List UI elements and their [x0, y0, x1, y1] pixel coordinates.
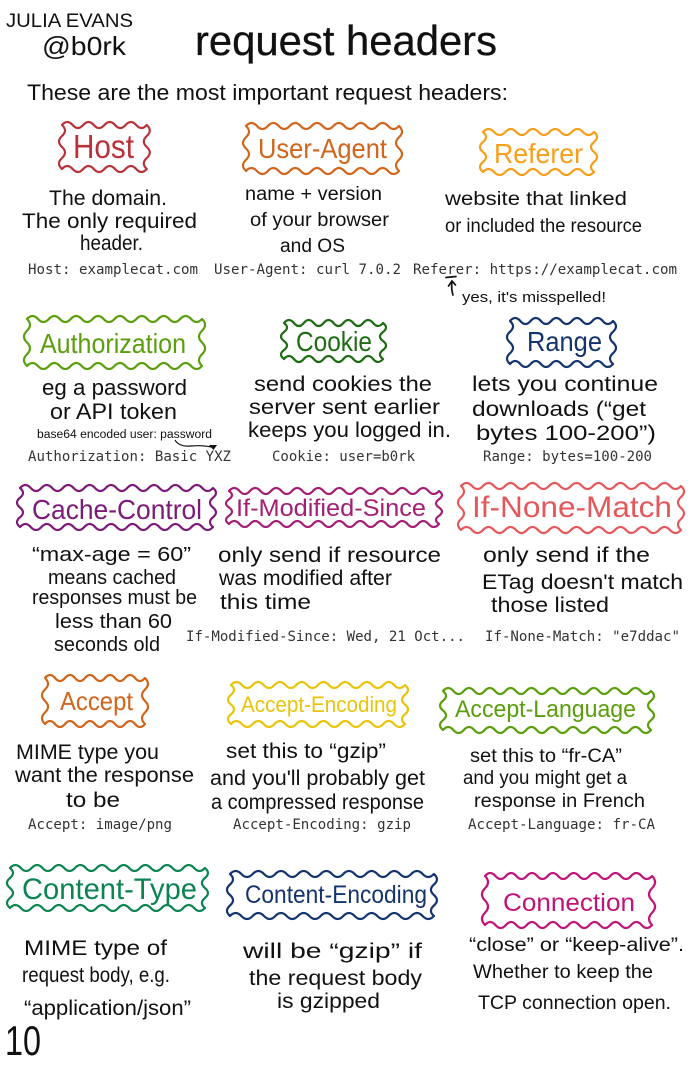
example: Accept: Accept: image/png — [28, 817, 172, 833]
wavy badge: Cache-Control — [17, 485, 216, 530]
example: Accept-Encoding: Accept-Encoding: gzip — [233, 817, 411, 833]
description: Accept-Encoding: a compressed response — [211, 791, 424, 814]
wavy badge: Host — [59, 122, 150, 172]
description: Authorization: eg a password — [42, 375, 187, 400]
wavy badge: Content-Type: Content-Type — [22, 873, 197, 906]
description: Connection: “close” or “keep-alive”. — [469, 935, 684, 956]
description: Accept: want the response — [14, 764, 194, 787]
wavy badge: Content-Encoding: Content-Encoding — [245, 881, 427, 909]
description: If-None-Match: ETag doesn't match — [482, 571, 683, 594]
description: Referer: website that linked — [444, 189, 627, 210]
note: base64 encoding — [37, 429, 217, 450]
description: If-None-Match — [482, 544, 683, 617]
description: Connection: Whether to keep the — [473, 962, 653, 983]
page number: 10 — [5, 1017, 41, 1064]
panel: Accept-Language — [440, 688, 655, 833]
panel: Content-Type — [7, 865, 208, 1020]
description: If-None-Match: those listed — [491, 594, 609, 617]
example: Range: Range: bytes=100-200 — [483, 449, 652, 465]
wavy badge: Accept: Accept — [60, 686, 134, 716]
author credit — [6, 11, 133, 61]
example: Accept-Language: Accept-Language: fr-CA — [468, 817, 655, 833]
description: Cookie — [248, 373, 451, 442]
description: Accept-Encoding: set this to “gzip” — [226, 740, 386, 763]
panel: Accept-Encoding — [210, 682, 425, 833]
wavy badge: Accept-Language: Accept-Language — [455, 696, 636, 723]
description: User-Agent: name + version — [245, 184, 382, 205]
description: Cache-Control: seconds old — [54, 634, 160, 656]
description: Referer: or included the resource — [445, 216, 642, 237]
description: Cache-Control: means cached — [48, 567, 176, 589]
description: Content-Encoding — [242, 940, 423, 1013]
description: Cookie: keeps you logged in. — [248, 419, 451, 442]
wavy badge: Connection — [482, 873, 655, 928]
description: Range: downloads (“get — [472, 398, 646, 421]
description: Content-Encoding: is gzipped — [277, 990, 380, 1013]
wavy badge: Accept-Encoding — [228, 682, 408, 727]
description: Content-Type: request body, e.g. — [22, 964, 170, 987]
description: If-Modified-Since: only send if resource — [218, 544, 441, 567]
panel: Range — [472, 318, 658, 465]
description: Cookie: send cookies the — [254, 373, 432, 396]
wavy badge: Cache-Control: Cache-Control — [32, 494, 202, 525]
wavy badge: Range: Range — [527, 326, 602, 357]
wavy badge: If-None-Match — [458, 483, 684, 533]
description: Referer — [444, 189, 642, 237]
annotation: misspelled arrow: yes, it's misspelled! — [462, 289, 606, 306]
description: Content-Type — [22, 937, 191, 1020]
description: Content-Type: MIME type of — [24, 937, 167, 960]
description: Authorization: or API token — [50, 399, 177, 424]
note: base64 encoding: base64 encoded user: password — [37, 429, 212, 441]
wavy badge: User-Agent — [243, 123, 402, 174]
description: Host: header. — [80, 232, 143, 255]
title: request headers — [195, 17, 497, 64]
description: Range: lets you continue — [472, 373, 658, 396]
description: Accept-Language: and you might get a — [463, 768, 627, 789]
description: If-None-Match: only send if the — [483, 544, 650, 567]
example: Referer: Referer: https://examplecat.com — [413, 262, 677, 278]
description: User-Agent: of your browser — [250, 210, 390, 231]
description: User-Agent — [245, 184, 390, 257]
panel: Connection — [469, 873, 684, 1014]
wavy badge: Content-Type — [7, 865, 208, 911]
example: User-Agent: User-Agent: curl 7.0.2 — [214, 262, 401, 278]
description: Accept-Language: response in French — [474, 791, 645, 812]
panel: If-None-Match — [458, 483, 684, 645]
example: If-None-Match: If-None-Match: "e7ddac" — [485, 629, 680, 645]
panel: If-Modified-Since — [186, 488, 465, 645]
description: Host: The domain. — [49, 187, 167, 210]
description: Authorization — [42, 375, 187, 424]
wavy badge: Accept — [42, 675, 148, 727]
description: Content-Encoding: the request body — [249, 967, 423, 990]
description: Range — [472, 373, 658, 445]
intro line: These are the most important request headers: — [27, 80, 508, 105]
panel: Referer — [413, 129, 677, 306]
description: Cookie: server sent earlier — [249, 396, 440, 419]
wavy badge: If-Modified-Since: If-Modified-Since — [236, 495, 426, 522]
description: Accept-Language — [463, 746, 645, 812]
description: Accept: MIME type you — [16, 741, 159, 764]
wavy badge: User-Agent: User-Agent — [258, 133, 387, 164]
annotation: misspelled arrow — [446, 276, 606, 306]
wavy badge: Connection: Connection — [503, 889, 635, 917]
description: Host: The only required — [22, 210, 197, 233]
wavy badge: If-Modified-Since — [226, 488, 442, 527]
description: If-Modified-Since — [218, 544, 441, 614]
description: If-Modified-Since: this time — [220, 591, 311, 614]
wavy badge: Host: Host — [73, 128, 134, 165]
wavy badge: If-None-Match: If-None-Match — [472, 491, 672, 524]
wavy badge: Accept-Encoding: Accept-Encoding — [241, 692, 397, 717]
wavy badge: Authorization — [24, 316, 205, 369]
description: Cache-Control: responses must be — [32, 587, 197, 609]
panel: Accept — [14, 675, 194, 833]
author credit: JULIA EVANS — [6, 11, 133, 32]
example: Authorization: Authorization: Basic YXZ — [28, 449, 231, 465]
description: Cache-Control: “max-age = 60” — [32, 544, 191, 566]
wavy badge: Referer: Referer — [494, 138, 583, 169]
description: Connection: TCP connection open. — [478, 993, 671, 1014]
panel: Host — [22, 122, 198, 278]
example: If-Modified-Since: If-Modified-Since: Wed, 21 Oct... — [186, 629, 465, 645]
description: Accept-Language: set this to “fr-CA” — [470, 746, 622, 767]
panel: Content-Encoding — [227, 871, 437, 1013]
panel: Authorization — [24, 316, 231, 465]
description: Connection — [469, 935, 684, 1014]
wavy badge: Accept-Language — [440, 688, 654, 733]
wavy badge: Range — [507, 318, 616, 367]
description: Range: bytes 100-200”) — [476, 422, 656, 445]
description: Cache-Control — [32, 544, 197, 656]
wavy badge: Cookie — [281, 320, 386, 362]
panel: Cookie — [248, 320, 451, 465]
example: Cookie: Cookie: user=b0rk — [272, 449, 415, 465]
wavy badge: Authorization: Authorization — [40, 328, 186, 359]
description: Cache-Control: less than 60 — [55, 611, 172, 633]
description: Accept-Encoding — [210, 740, 425, 814]
panel: User-Agent — [214, 123, 402, 278]
description: Content-Encoding: will be “gzip” if — [242, 940, 422, 963]
description: Host — [22, 187, 197, 255]
description: User-Agent: and OS — [280, 236, 345, 257]
wavy badge: Cookie: Cookie — [296, 326, 372, 357]
description: Accept: to be — [66, 789, 120, 812]
description: Content-Type: “application/json” — [24, 997, 191, 1020]
description: Accept-Encoding: and you'll probably get — [210, 767, 425, 790]
example: Host: Host: examplecat.com — [28, 262, 198, 278]
wavy badge: Content-Encoding — [227, 871, 437, 919]
panel: Cache-Control — [17, 485, 216, 656]
description: If-Modified-Since: was modified after — [218, 567, 392, 590]
wavy badge: Referer — [480, 129, 597, 175]
description: Accept — [14, 741, 194, 812]
author credit: @b0rk — [42, 31, 127, 61]
